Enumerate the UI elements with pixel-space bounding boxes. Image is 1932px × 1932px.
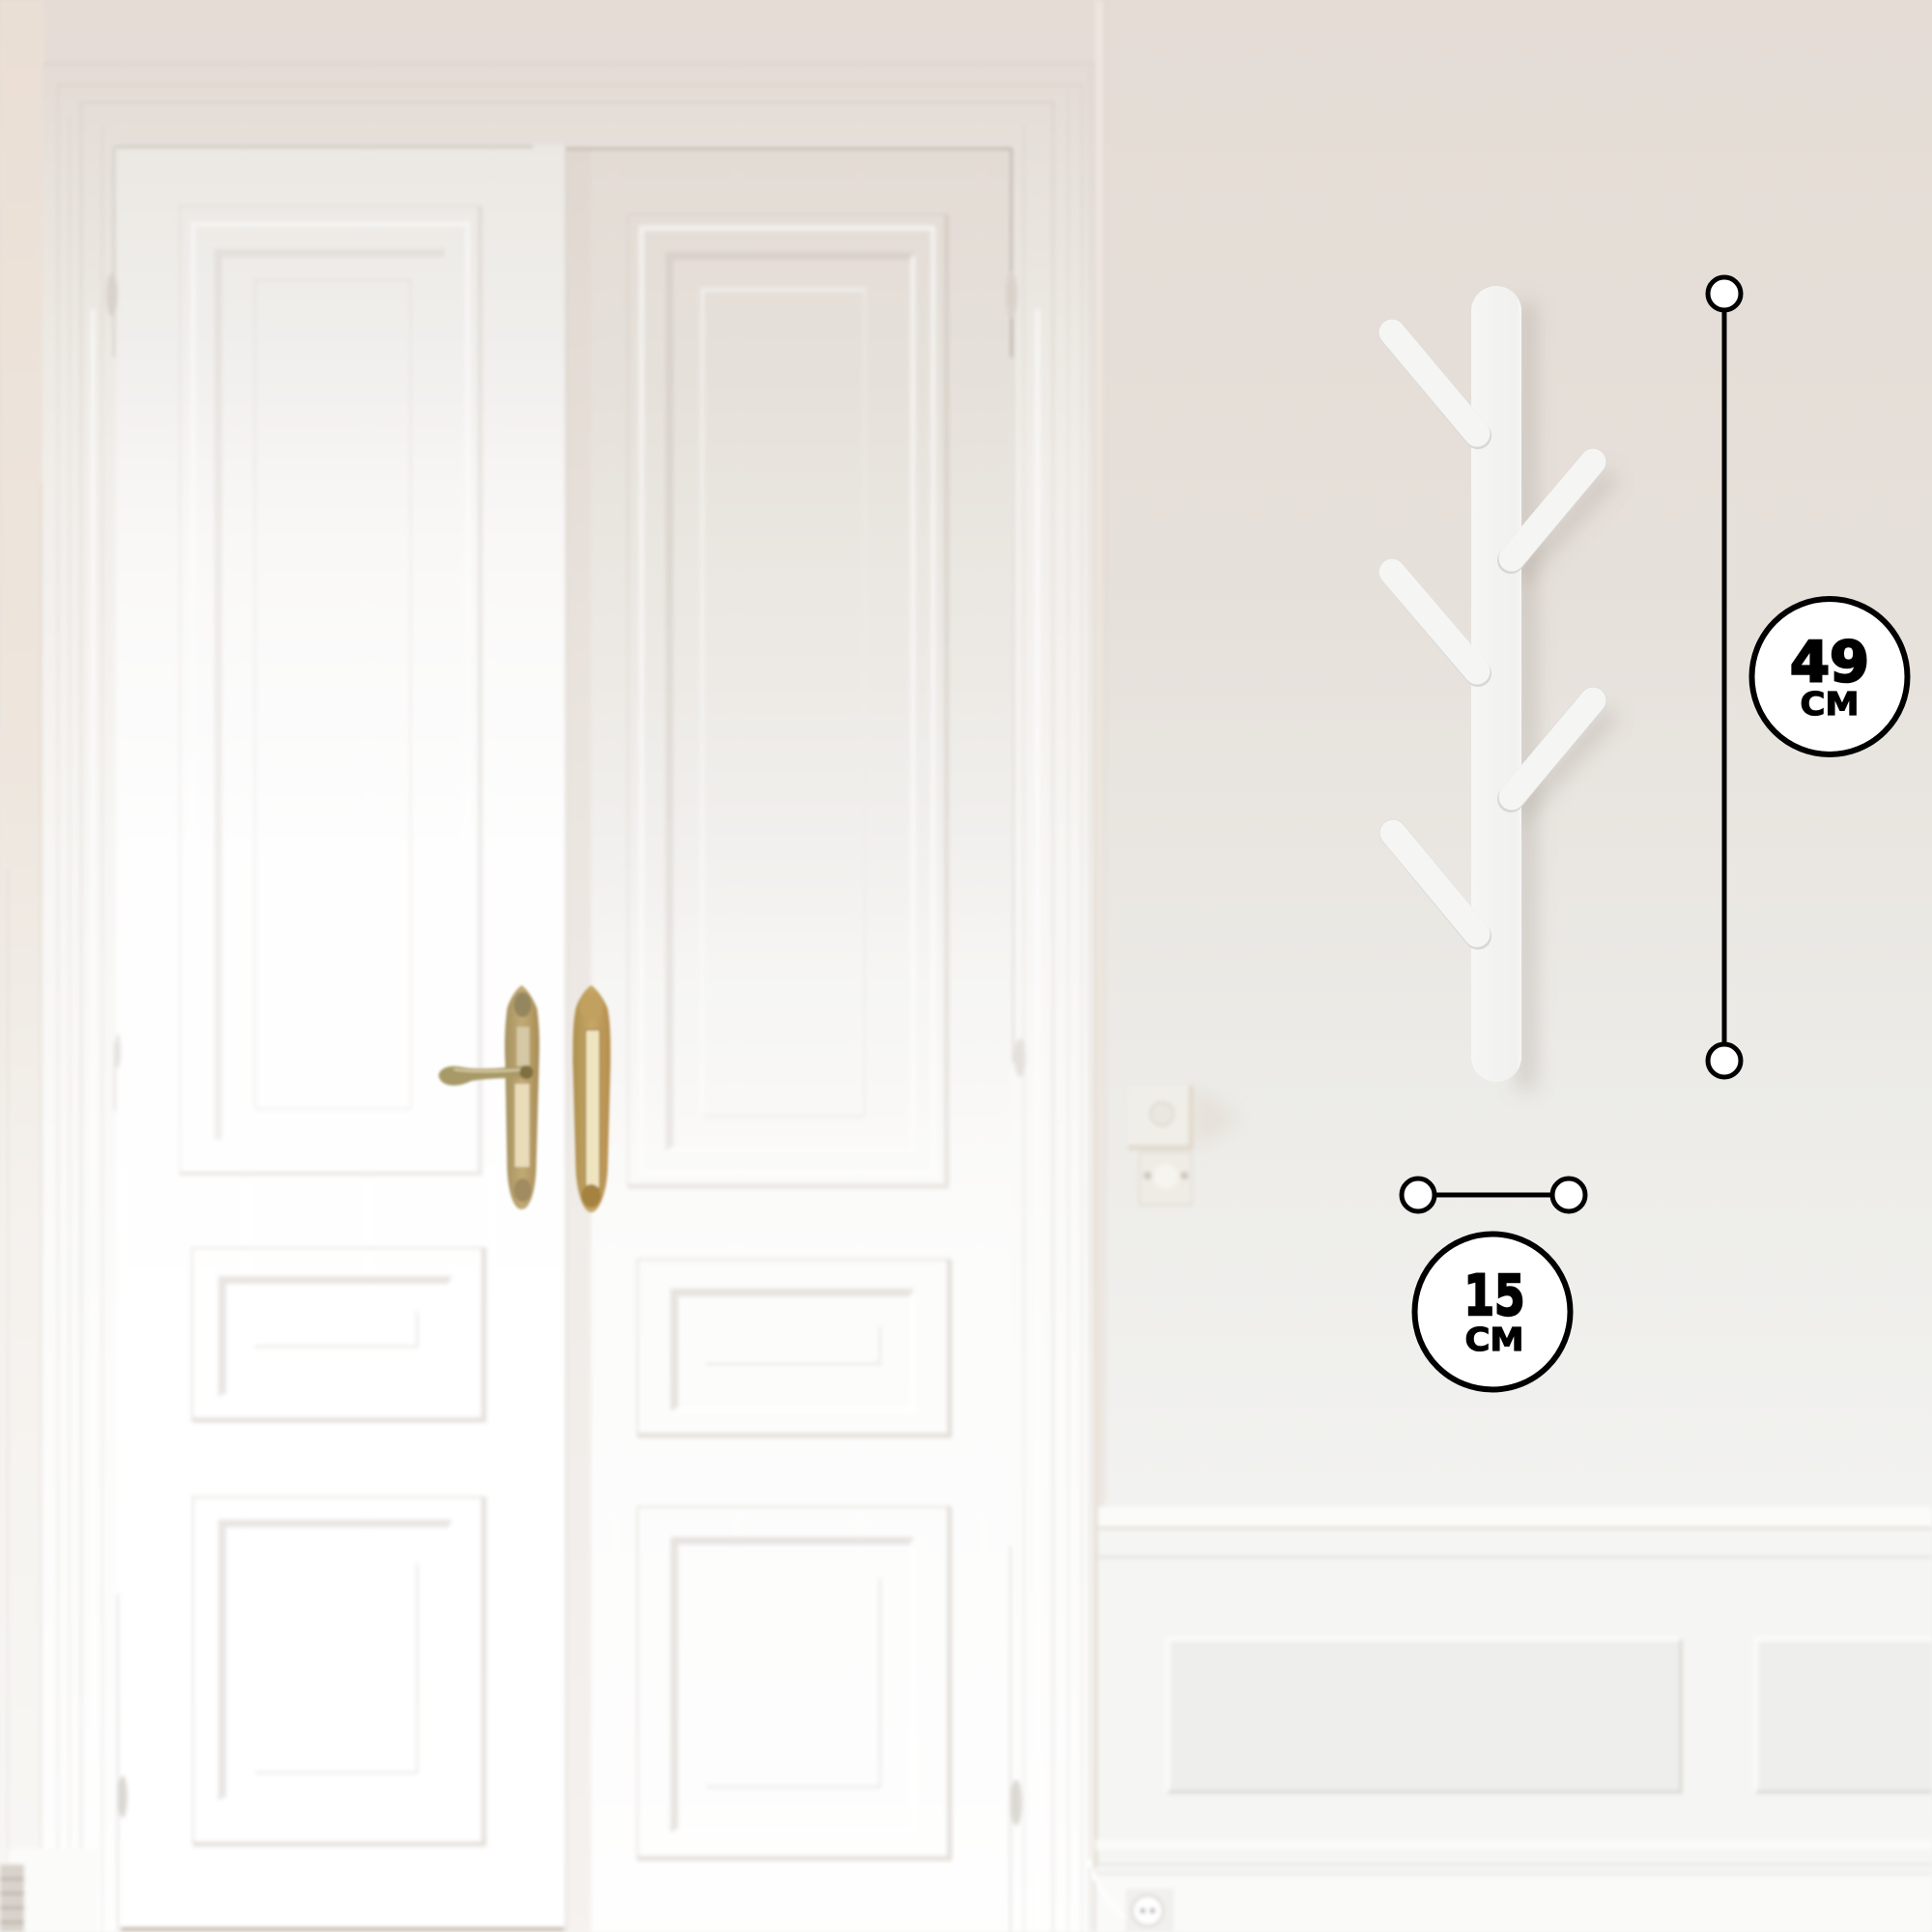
door reveal at wall	[1095, 0, 1103, 1507]
left branch 3	[1393, 833, 1478, 936]
left leaf middle panel	[192, 1248, 484, 1420]
trunk	[1471, 286, 1521, 1082]
left door back plate	[505, 985, 539, 1209]
right branch 1	[1511, 462, 1593, 560]
left branch 1	[1392, 332, 1478, 436]
width dimension line	[1402, 1179, 1585, 1211]
left leaf lower panel	[193, 1497, 484, 1844]
right leaf upper panel	[628, 214, 947, 1186]
rack shadow	[1520, 309, 1607, 1082]
floor corner and plinth	[0, 1849, 564, 1932]
hinges	[106, 271, 1026, 1826]
coat rack	[1392, 286, 1607, 1082]
left door leaf	[114, 145, 566, 1932]
wall outlet and cable	[1090, 1860, 1174, 1932]
lever handle	[439, 1065, 533, 1086]
height badge: 49 cm	[1752, 599, 1907, 754]
right door back plate	[573, 985, 611, 1212]
height badge: 49 cm: 49	[1790, 629, 1869, 695]
right door leaf	[566, 149, 1013, 1932]
wainscoting dado rail	[1095, 1507, 1932, 1932]
door edge between leaves	[565, 145, 567, 1932]
left edge wall strip	[0, 0, 44, 1932]
right branch 2	[1511, 700, 1593, 799]
left branch 2	[1392, 572, 1478, 673]
left leaf upper panel	[180, 206, 480, 1174]
height badge: 49 cm: CM	[1801, 685, 1859, 723]
right leaf middle panel	[638, 1260, 950, 1435]
right leaf lower panel	[638, 1507, 950, 1859]
door handles	[439, 985, 611, 1212]
width badge: 15 cm	[1414, 1235, 1571, 1389]
height dimension line	[1708, 277, 1741, 1077]
wainscot panels	[1168, 1639, 1932, 1792]
baseboard	[1095, 1845, 1932, 1932]
width badge: 15 cm: CM	[1464, 1321, 1524, 1358]
light switch	[1128, 1084, 1241, 1205]
width badge: 15 cm: 15	[1464, 1263, 1524, 1328]
door surround	[8, 64, 1095, 1932]
